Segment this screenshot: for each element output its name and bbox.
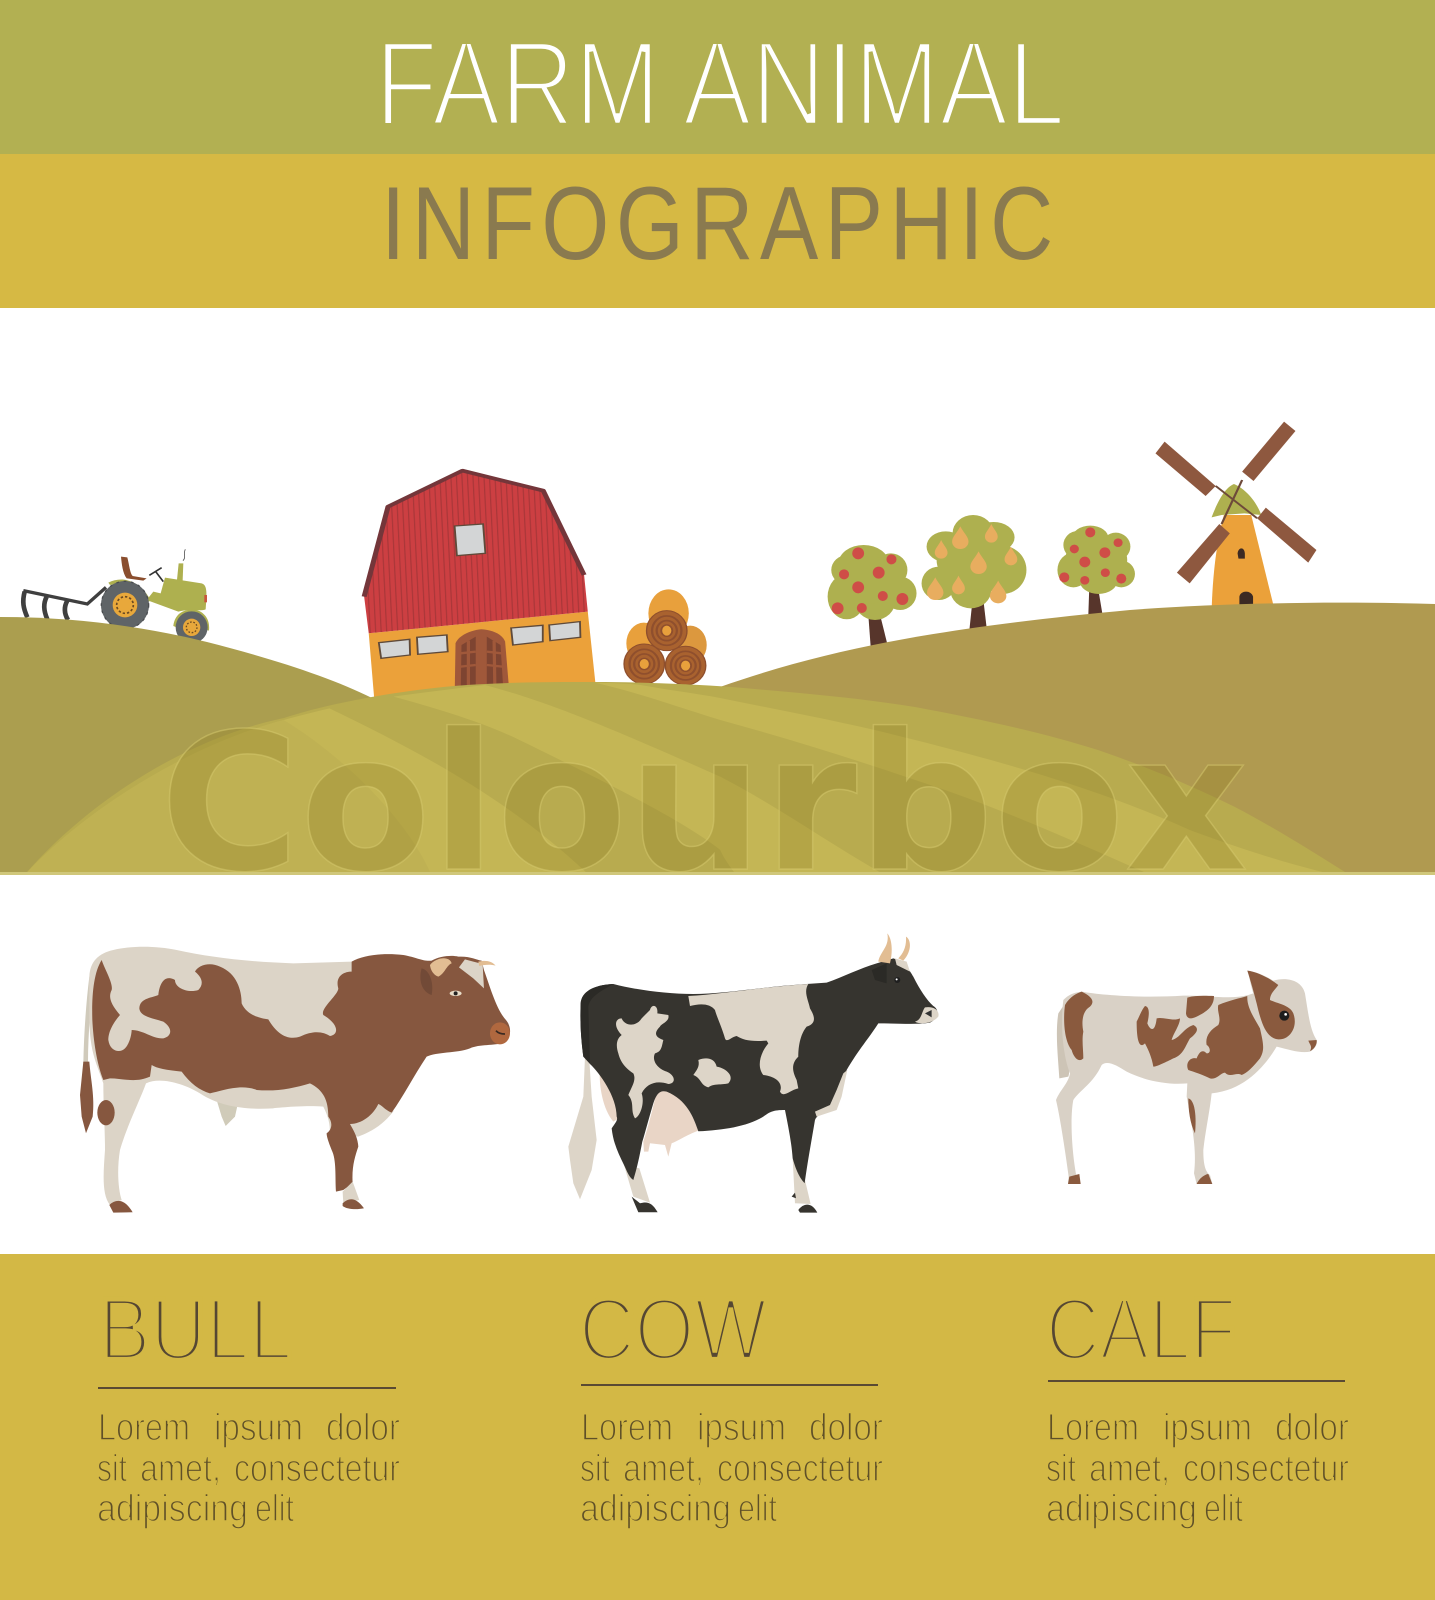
- right back hill: [720, 603, 1435, 873]
- tractor with plough: [23, 549, 209, 643]
- cow text: consectetur: [717, 1448, 883, 1490]
- cow text: dolor: [809, 1407, 883, 1449]
- bull text: amet,: [140, 1448, 221, 1490]
- plough: [23, 587, 106, 620]
- calf text: [1046, 1407, 1349, 1530]
- watermark: Colourbox: [160, 693, 1248, 914]
- cow udder: [643, 1091, 698, 1157]
- calf text: sit: [1046, 1448, 1076, 1490]
- bull udder tuft: [217, 1100, 238, 1126]
- calf text: consectetur: [1183, 1448, 1349, 1490]
- barn wall: [369, 612, 597, 710]
- calf text: amet,: [1089, 1448, 1170, 1490]
- cow: [568, 933, 939, 1213]
- red lamp: [204, 595, 207, 602]
- cow patches: [616, 958, 939, 1118]
- calf heading: CALF: [1046, 1280, 1236, 1378]
- calf text: Lorem: [1047, 1407, 1139, 1449]
- exhaust: [177, 563, 183, 581]
- field stripes: [27, 683, 1322, 872]
- calf tail: [1057, 1003, 1069, 1078]
- column: cow: [579, 1280, 883, 1530]
- bull head details: [420, 968, 432, 995]
- bull: [80, 947, 510, 1213]
- big wheel: [101, 581, 149, 629]
- bull tail: [83, 977, 93, 1063]
- left back hill: [0, 617, 372, 872]
- cow heading: COW: [579, 1280, 767, 1378]
- info panel: [0, 1254, 1435, 1600]
- calf body: [1056, 971, 1317, 1184]
- front wheel: [176, 611, 208, 643]
- cow rear pink: [600, 1067, 622, 1122]
- cow text: adipiscing: [580, 1488, 731, 1530]
- barn roof: [364, 469, 588, 633]
- calf eye: [1279, 1011, 1289, 1021]
- bull heading: BULL: [99, 1280, 292, 1378]
- cow text: Lorem: [581, 1407, 673, 1449]
- seat: [121, 557, 147, 581]
- cow text: elit: [738, 1488, 777, 1530]
- title band: farm animal: [0, 0, 1435, 154]
- bull body: [89, 947, 393, 1205]
- calf: [1056, 971, 1317, 1184]
- bull text: consectetur: [234, 1448, 400, 1490]
- cow head details: [878, 933, 910, 963]
- calf text: ipsum: [1163, 1407, 1252, 1449]
- column: bull: [97, 1280, 400, 1530]
- bull text: ipsum: [214, 1407, 303, 1449]
- subtitle text: INFOGRAPHIC: [381, 166, 1060, 282]
- calf text: adipiscing: [1046, 1488, 1197, 1530]
- cow text: [580, 1407, 883, 1530]
- column: calf: [1046, 1280, 1349, 1530]
- landscape: hills and fields: [0, 603, 1435, 875]
- title text: FARM ANIMAL: [375, 15, 1065, 151]
- bull text: dolor: [326, 1407, 400, 1449]
- bull text: Lorem: [98, 1407, 190, 1449]
- hay bales: [624, 589, 707, 685]
- cow body: [580, 958, 937, 1183]
- steering: [149, 568, 163, 582]
- cow tail: [568, 1057, 597, 1199]
- bull text: [97, 1407, 400, 1530]
- cow hooves: [632, 1193, 817, 1213]
- bull text: adipiscing: [97, 1488, 248, 1530]
- cow legs socks: [624, 1158, 811, 1204]
- cow back dark rump: [580, 984, 613, 1063]
- barn door: [455, 629, 510, 700]
- subtitle band: infographic: [0, 154, 1435, 308]
- bull text: elit: [255, 1488, 294, 1530]
- calf text: elit: [1204, 1488, 1243, 1530]
- windmill sails: [1155, 422, 1316, 583]
- bull legs spots and hooves: [97, 1100, 115, 1125]
- apple tree left: [828, 545, 917, 657]
- barn windows: [379, 524, 580, 658]
- cow text: sit: [580, 1448, 610, 1490]
- cow text: amet,: [623, 1448, 704, 1490]
- fenders: [108, 580, 209, 631]
- windmill: [1155, 422, 1316, 613]
- front field: [27, 682, 1345, 872]
- barn: [364, 469, 597, 710]
- cow text: ipsum: [697, 1407, 786, 1449]
- tractor body: [147, 578, 206, 612]
- bull brown coat: [92, 954, 510, 1192]
- calf patches: [1064, 971, 1317, 1184]
- apple tree right: [1057, 526, 1135, 625]
- pear tree: [922, 515, 1026, 638]
- bull text: sit: [97, 1448, 127, 1490]
- calf text: dolor: [1275, 1407, 1349, 1449]
- bale rolls: [624, 611, 706, 685]
